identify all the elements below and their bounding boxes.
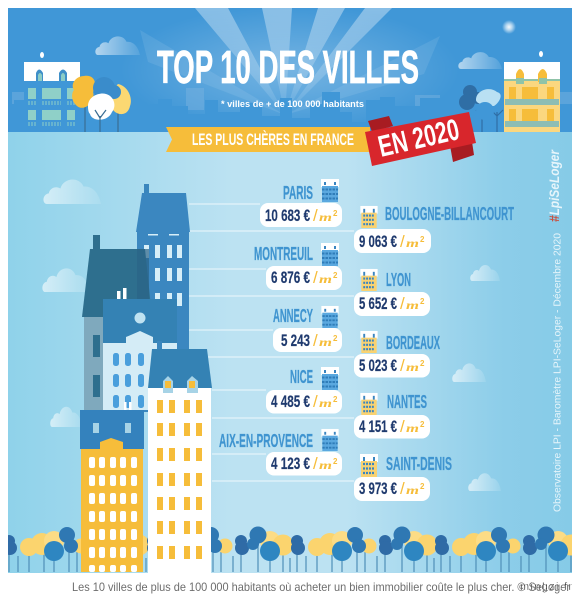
cloud top right: [458, 52, 502, 69]
skyline silhouette: [8, 92, 572, 133]
entry: Boulogne-Billancourt: /: [400, 232, 405, 251]
entry: Aix-en-Provence: 4 123 €: [271, 454, 310, 473]
entry: Saint-Denis: 2: [420, 482, 425, 491]
tall blue building: [136, 184, 190, 412]
banner text: EN 2020: [375, 113, 462, 164]
ribbon heading: LES PLUS CHÈRES EN FRANCE: [192, 130, 354, 149]
tree row: [3, 526, 582, 572]
entry: Annecy: [273, 306, 342, 352]
sun rays: [140, 8, 440, 115]
entry: Saint-Denis: /: [400, 479, 405, 498]
entry: Nice: /: [313, 392, 318, 411]
panel: upper sky: [8, 8, 572, 133]
entry: Annecy: /: [313, 331, 318, 350]
entry: Nice: m: [319, 396, 332, 410]
left header trees: [72, 76, 131, 132]
entry: Annecy: m: [319, 335, 332, 349]
skyline lighter back layer: [12, 88, 572, 112]
entry: Nantes: NANTES: [387, 392, 427, 412]
cloud right 2: [452, 363, 486, 382]
entry: Nice: NICE: [290, 367, 313, 387]
entry: Aix-en-Provence: [219, 429, 342, 476]
right header trees: [459, 85, 503, 132]
watermark: mingzi.fr: [520, 581, 572, 593]
yellow ribbon: [166, 127, 370, 152]
entry: Aix-en-Provence: AIX-EN-PROVENCE: [219, 431, 313, 451]
red banner: [365, 112, 476, 166]
entry: Lyon: /: [400, 294, 405, 313]
entry: Bordeaux: /: [400, 356, 405, 375]
entry: Lyon: 2: [420, 297, 425, 306]
white front building: [148, 349, 212, 573]
panel: lower sky: [8, 132, 572, 573]
entry: Paris: m: [319, 210, 332, 224]
entry: Saint-Denis: m: [406, 483, 419, 497]
entry: Nantes: 2: [420, 420, 425, 429]
entry: Bordeaux: 2: [420, 359, 425, 368]
cloud left 3: [50, 407, 82, 427]
entry: Lyon: m: [406, 298, 419, 312]
entry: Nantes: m: [406, 421, 419, 435]
entry: Annecy: 5 243: [281, 331, 310, 350]
entry: Saint-Denis: SAINT-DENIS: [386, 454, 452, 474]
entry: Aix-en-Provence: /: [313, 454, 318, 473]
entry: Nantes: /: [400, 417, 405, 436]
entry: Nantes: [354, 392, 430, 438]
entry: Saint-Denis: 3 973 €: [359, 479, 397, 498]
entry: Montreuil: m: [319, 272, 332, 286]
right header building: [504, 51, 560, 132]
connector lines: [189, 204, 354, 481]
entry: Paris: [260, 179, 342, 227]
middle blue house: [103, 288, 177, 410]
cloud right 1: [470, 265, 500, 281]
entry: Montreuil: /: [313, 268, 318, 287]
entry: Nice: 4 485 €: [271, 392, 310, 411]
entry: Boulogne-Billancourt: m: [406, 236, 419, 250]
source: Observatoire LPI - Baromètre LPI-SeLoger - Décembre 2020: [552, 233, 564, 512]
entry: Boulogne-Billancourt: 9 063 €: [359, 232, 397, 251]
entry: Lyon: [354, 269, 430, 316]
entry: Saint-Denis: [354, 454, 452, 501]
sun: [502, 20, 516, 34]
entry: Bordeaux: m: [406, 360, 419, 374]
entry: Nice: [266, 367, 342, 414]
entry: Bordeaux: [354, 331, 440, 378]
cloud left 2: [42, 268, 90, 292]
entry: Bordeaux: 5 023 €: [359, 356, 397, 375]
title: TOP 10 DES VILLES: [157, 41, 419, 93]
entry: Annecy: 2: [333, 334, 338, 343]
entry: Paris: PARIS: [283, 183, 313, 203]
left header building: [24, 52, 80, 124]
entry: Lyon: 5 652 €: [359, 294, 397, 313]
yellow building: [80, 402, 144, 572]
hashtag: #LpiSeLoger: [546, 149, 562, 222]
entry: Montreuil: 2: [333, 271, 338, 280]
entry: Lyon: LYON: [386, 270, 411, 290]
entry: Paris: /: [313, 206, 318, 225]
entry: Nantes: 4 151 €: [359, 417, 397, 436]
entry: Nice: 2: [333, 395, 338, 404]
entry: Paris: 10 683 €: [265, 206, 310, 225]
dark teal house: [82, 235, 152, 413]
entry: Montreuil: MONTREUIL: [254, 244, 313, 264]
entry: Boulogne-Billancourt: 2: [420, 235, 425, 244]
entry: Paris: 2: [333, 209, 338, 218]
entry: Boulogne-Billancourt: [354, 204, 514, 253]
entry: Annecy: ANNECY: [273, 306, 313, 326]
cloud left 1: [43, 180, 101, 204]
cloud right 3: [468, 473, 501, 491]
title glow: [120, 5, 460, 135]
entry: Aix-en-Provence: 2: [333, 457, 338, 466]
subtitle: * villes de + de 100 000 habitants: [221, 99, 364, 109]
entry: Montreuil: [254, 243, 342, 290]
entry: Bordeaux: BORDEAUX: [386, 333, 440, 353]
cloud top left: [95, 36, 140, 55]
entry: Aix-en-Provence: m: [319, 458, 332, 472]
entry: Montreuil: 6 876 €: [271, 268, 310, 287]
